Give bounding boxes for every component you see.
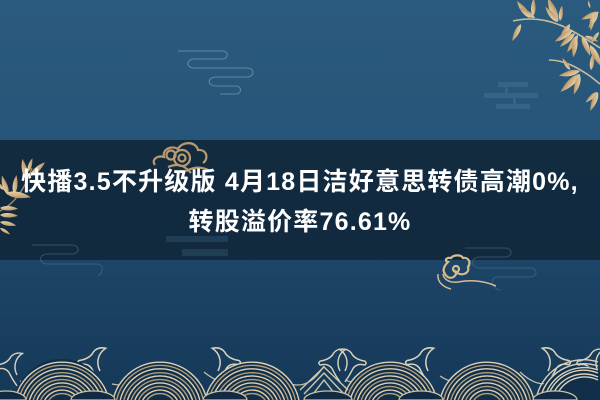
title	[21, 168, 579, 236]
bamboo: upper right	[510, 0, 600, 112]
gold cloud: in band	[154, 143, 210, 173]
pale marks in band	[166, 236, 228, 256]
title line 1: 快播3.5不升级版 4月18日洁好意思转债高潮0%,	[21, 168, 579, 196]
waves: bottom ornament	[0, 348, 600, 400]
gold cloud: lower right	[438, 255, 496, 289]
bamboo: left in band	[0, 158, 47, 236]
title line 2: 转股溢价率76.61%	[188, 208, 412, 236]
dark central band	[0, 140, 600, 260]
pale cloud line: top centre	[178, 51, 253, 94]
pale bars: upper right	[484, 82, 538, 109]
